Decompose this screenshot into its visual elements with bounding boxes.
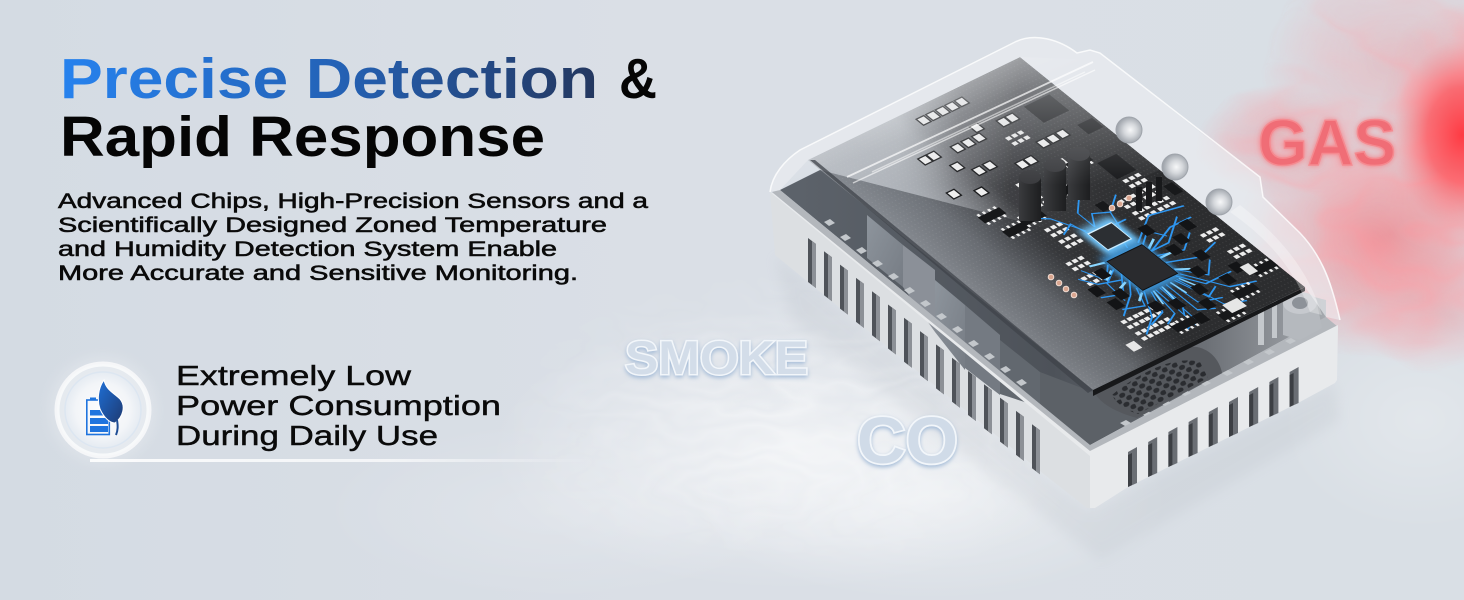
callout text (176, 360, 501, 451)
contact pads (1048, 195, 1132, 298)
speaker mesh (1095, 347, 1222, 418)
rim (770, 190, 1338, 456)
divider glow line (90, 459, 590, 462)
floor reflection (775, 255, 1340, 560)
board standoffs (1258, 298, 1277, 345)
pin headers (1136, 177, 1162, 211)
blue traces (1015, 169, 1281, 344)
main chip with glow (1100, 240, 1185, 296)
device: sensor module (770, 38, 1340, 560)
rim nubs (824, 219, 1296, 426)
capacitors (1019, 147, 1090, 221)
bright traces (1089, 236, 1213, 315)
callout text: Extremely Low (176, 360, 412, 391)
white pads (877, 78, 1086, 207)
label: GAS: GAS (1258, 106, 1396, 179)
connectors (992, 90, 1183, 223)
callout text: During Daily Use (176, 420, 438, 451)
description text: Scientifically Designed Zoned Temperature (58, 214, 607, 237)
icon: leaf (98, 380, 123, 435)
label: SMOKE: SMOKE (625, 331, 808, 384)
tray partitions (867, 215, 1137, 445)
icon: battery with leaf in glowing circle (49, 356, 157, 464)
icon: battery (87, 398, 109, 434)
screw post (1283, 292, 1322, 340)
small SMD components (926, 119, 1124, 242)
secondary chip with glow (1078, 216, 1141, 257)
description text: and Humidity Detection System Enable (58, 238, 557, 261)
callout text: Power Consumption (176, 390, 501, 421)
dome highlight streaks (847, 62, 1095, 183)
red gas smoke (1200, 0, 1464, 370)
title: & (619, 47, 657, 111)
label: CO: CO (857, 403, 958, 477)
silver components (1108, 263, 1281, 357)
bolts (1116, 117, 1232, 215)
PCB board (808, 57, 1305, 390)
white smoke haze (320, 270, 1464, 600)
base walls (770, 192, 1338, 508)
PCB edge (1093, 287, 1305, 396)
description text: More Accurate and Sensitive Monitoring. (58, 262, 578, 285)
right fin slots (1128, 367, 1299, 487)
description text: Advanced Chips, High-Precision Sensors and a (58, 190, 648, 213)
left fin slots (808, 238, 1040, 474)
dark ICs (1059, 200, 1304, 353)
title (60, 47, 657, 169)
title: Precise Detection (60, 47, 598, 111)
transparent dome cover (770, 38, 1340, 320)
title: Rapid Response (60, 105, 545, 169)
inner tray (780, 170, 1326, 445)
PCB left channel strip (810, 160, 1093, 393)
pin grid (1012, 168, 1281, 341)
description text (58, 190, 648, 285)
